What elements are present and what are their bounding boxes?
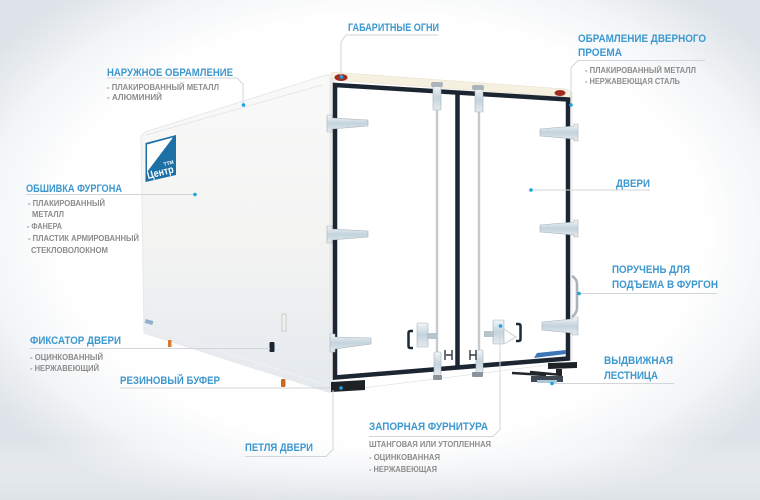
logo <box>146 135 176 182</box>
centre door seal <box>455 91 460 368</box>
rubber feet <box>168 340 286 387</box>
callout: наружное обрамление: НАРУЖНОЕ ОБРАМЛЕНИЕ <box>107 67 233 79</box>
callout: габаритные огни <box>340 22 439 79</box>
callout: резиновый буфер: РЕЗИНОВЫЙ БУФЕР <box>120 374 220 387</box>
top cream strip <box>331 72 572 98</box>
side vent <box>282 314 286 331</box>
callout: фиксатор двери: ФИКСАТОР ДВЕРИ <box>30 335 121 347</box>
hinges right door <box>540 124 578 335</box>
callout: запорная фурнитура: ШТАНГОВАЯ ИЛИ УТОПЛЕННАЯ <box>369 439 491 449</box>
callout: выдвижная лестница: ЛЕСТНИЦА <box>604 370 658 382</box>
rod top brackets <box>431 82 484 112</box>
callout: фиксатор двери: - НЕРЖАВЕЮЩИЙ <box>30 362 99 373</box>
door sticker <box>534 350 566 358</box>
rear wall <box>330 75 572 392</box>
callout: поручень <box>577 264 718 295</box>
callout: обрамление дверного проема: - ПЛАКИРОВАННЫЙ МЕТАЛЛ <box>585 64 696 75</box>
logo: Центр <box>146 164 175 182</box>
callout: выдвижная лестница <box>550 355 674 385</box>
callout: запорная фурнитура: ЗАПОРНАЯ ФУРНИТУРА <box>369 421 488 433</box>
callout: запорная фурнитура: - НЕРЖАВЕЮЩАЯ <box>369 464 437 474</box>
side small plate <box>145 319 153 325</box>
callout: обрамление дверного проема: ПРОЕМА <box>578 47 622 59</box>
van body <box>141 72 578 392</box>
callout: обшивка фургона: - ФАНЕРА <box>27 221 62 231</box>
callout: поручень: ПОРУЧЕНЬ ДЛЯ <box>612 264 690 276</box>
side roof edge <box>146 85 322 135</box>
callout: выдвижная лестница: ВЫДВИЖНАЯ <box>604 355 673 367</box>
callout: петля двери <box>245 386 343 456</box>
rubber bumper left <box>331 380 365 392</box>
door frame seal <box>335 85 568 378</box>
callout: габаритные огни: ГАБАРИТНЫЕ ОГНИ <box>348 22 439 34</box>
callout: обрамление дверного проема <box>569 33 706 107</box>
callout: запорная фурнитура <box>369 324 502 474</box>
rod bottom brackets <box>433 350 483 380</box>
floor shading <box>0 440 760 500</box>
callout: поручень: ПОДЪЕМА В ФУРГОН <box>612 279 718 291</box>
callout: обшивка фургона: СТЕКЛОВОЛОКНОМ <box>31 245 108 255</box>
side bottom skirt line <box>145 326 326 385</box>
grab handle <box>572 276 577 317</box>
door stopper on side <box>270 342 274 352</box>
marker light right <box>554 90 566 96</box>
hinges left door <box>327 115 371 352</box>
callout: наружное обрамление: - АЛЮМИНИЙ <box>107 91 162 102</box>
pull-out ladder <box>512 369 563 383</box>
side wall <box>141 75 331 392</box>
callout: обшивка фургона <box>26 183 197 255</box>
callout: фиксатор двери <box>30 335 270 373</box>
logo: ТТМ <box>163 160 174 168</box>
left strip of rear <box>330 76 334 392</box>
callout: обрамление дверного проема: - НЕРЖАВЕЮЩАЯ СТАЛЬ <box>585 76 680 86</box>
lock right <box>484 320 520 344</box>
callout: фиксатор двери: - ОЦИНКОВАННЫЙ <box>30 351 103 362</box>
marker light left <box>334 74 348 81</box>
callout: наружное обрамление: - ПЛАКИРОВАННЫЙ МЕТАЛЛ <box>107 81 219 92</box>
callout: двери: ДВЕРИ <box>616 178 650 190</box>
bar rods <box>437 90 479 376</box>
callout: обрамление дверного проема: ОБРАМЛЕНИЕ ДВЕРНОГО <box>578 33 706 45</box>
rubber bumper right <box>548 362 577 369</box>
callout: наружное обрамление <box>107 67 245 107</box>
callout: обшивка фургона: - ПЛАСТИК АРМИРОВАННЫЙ <box>28 232 139 243</box>
callout: обшивка фургона: ОБШИВКА ФУРГОНА <box>26 183 122 195</box>
callout: двери <box>529 178 650 192</box>
callout: обшивка фургона: МЕТАЛЛ <box>32 209 64 219</box>
callout: обшивка фургона: - ПЛАКИРОВАННЫЙ <box>28 197 105 208</box>
callout: петля двери: ПЕТЛЯ ДВЕРИ <box>245 442 313 454</box>
lock left <box>408 323 438 348</box>
callout: запорная фурнитура: - ОЦИНКОВАННАЯ <box>369 452 440 462</box>
